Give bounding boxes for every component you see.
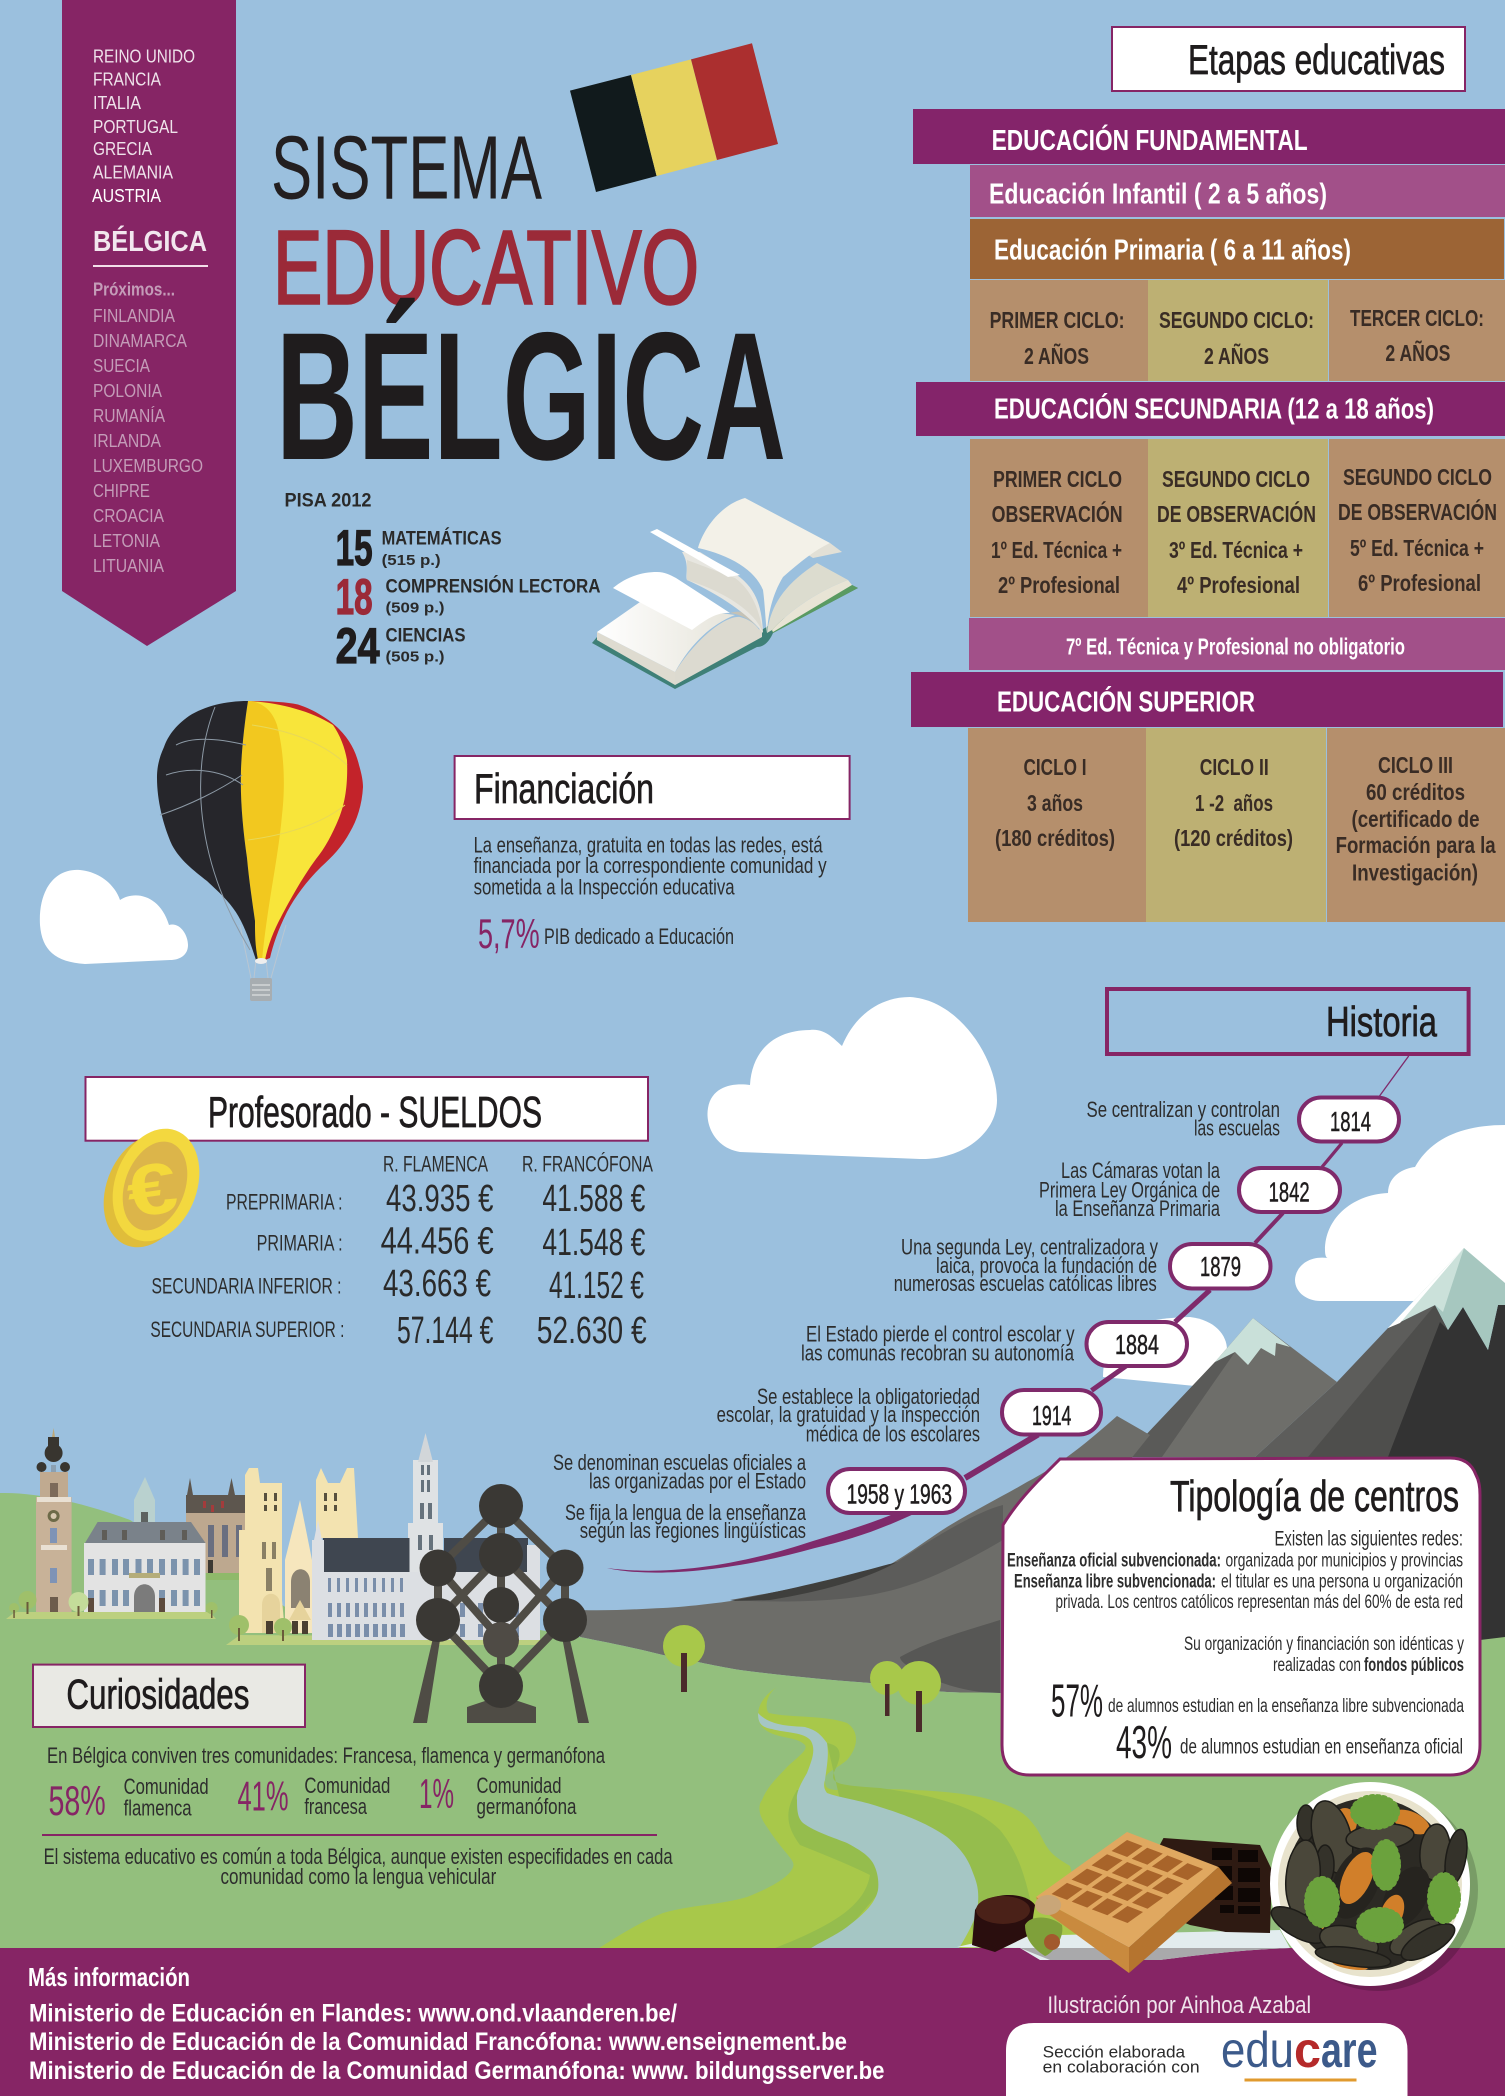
published countries list: ALEMANIA <box>93 163 173 183</box>
financing text: financiada por la correspondiente comunidad y <box>474 853 827 878</box>
higher education cycles: 1 -2 años <box>1195 790 1273 816</box>
building: grey hall <box>84 1477 206 1613</box>
upcoming countries list: SUECIA <box>93 356 150 376</box>
financing text <box>474 832 827 900</box>
panel: Curiosidades: El sistema educativo es común a toda Bélgica, aunque existen especifidades en cada <box>44 1844 673 1869</box>
footer: educare logo card: edu <box>1221 2022 1294 2078</box>
icon: open book <box>592 498 858 689</box>
higher education cycles: (180 créditos) <box>995 825 1115 851</box>
PISA 2012 results <box>284 491 601 674</box>
river: water <box>758 1713 978 1950</box>
panel: Financiación: Financiación <box>474 765 654 812</box>
event 1914: Se establece la obligatoriedad <box>757 1384 980 1409</box>
primary cycles: PRIMER CICLO: <box>990 307 1125 333</box>
footer: educare logo card: c <box>1294 2022 1321 2078</box>
PISA 2012 results: CIENCIAS <box>386 626 466 646</box>
upcoming countries list: RUMANÍA <box>93 406 165 426</box>
cloud: behind 1884 <box>1103 1317 1227 1386</box>
event 1958 y 1963: Se fija la lengua de la enseñanza <box>565 1500 807 1525</box>
salary table: 43.663 € <box>383 1263 491 1305</box>
community shares: 1% <box>419 1770 454 1817</box>
secondary cycles: PRIMER CICLO <box>993 466 1122 492</box>
secondary cycles: 2º Profesional <box>998 572 1120 598</box>
network descriptions: realizadas con <box>1273 1655 1361 1676</box>
timeline: connecting line <box>607 1056 1409 1573</box>
event 1958 y 1963: Se denominan escuelas oficiales a <box>553 1450 807 1475</box>
salary table: PREPRIMARIA : <box>226 1190 342 1214</box>
ground: green meadow <box>0 1493 1505 1950</box>
heading: Etapas educativas <box>1112 27 1465 91</box>
event 1884 <box>801 1322 1187 1366</box>
river: banks <box>596 1687 1090 1950</box>
footer: more information <box>28 1962 885 2085</box>
timeline: events <box>553 1097 1399 1543</box>
salary table: SECUNDARIA INFERIOR : <box>152 1274 342 1298</box>
primary cycles <box>970 280 1505 381</box>
panel: educación superior: EDUCACIÓN SUPERIOR <box>997 684 1255 718</box>
event 1879: numerosas escuelas católicas libres <box>894 1271 1157 1296</box>
food: plate of mussels <box>1266 1782 1478 1991</box>
stat: GDP share: PIB dedicado a Educación <box>544 924 734 949</box>
mountain: big grey foreground slope <box>580 1416 1300 1700</box>
salary table <box>150 1152 653 1352</box>
panel: Curiosidades: En Bélgica conviven tres comunidades: Francesa, flamenca y germanófona <box>47 1743 606 1768</box>
stat: GDP share <box>478 910 734 957</box>
event 1814 <box>1086 1097 1399 1142</box>
footer: educare logo card: en colaboración con <box>1043 2058 1200 2077</box>
upcoming countries list <box>93 280 203 576</box>
event 1884: El Estado pierde el control escolar y <box>806 1322 1074 1346</box>
community shares: Comunidad <box>124 1774 209 1799</box>
salary table: 41.588 € <box>542 1178 645 1220</box>
event 1842 <box>1039 1158 1340 1221</box>
PISA 2012 results: PISA 2012 <box>284 491 372 512</box>
stats: student shares: 57% <box>1051 1675 1103 1727</box>
event 1814: 1814 <box>1330 1106 1371 1137</box>
upcoming countries list: IRLANDA <box>93 431 161 451</box>
higher education cycles: Investigación) <box>1352 860 1478 886</box>
event 1958 y 1963: las organizadas por el Estado <box>589 1468 806 1494</box>
secondary cycles <box>970 439 1505 617</box>
event 1879: 1879 <box>1200 1251 1241 1282</box>
event 1879 <box>894 1235 1270 1296</box>
panel: Financiación <box>455 756 850 957</box>
ground strip right <box>226 1635 540 1645</box>
icon: hot-air balloon <box>157 701 363 1001</box>
event 1884: 1884 <box>1115 1329 1159 1360</box>
salary table: 43.935 € <box>386 1178 494 1220</box>
event 1884: las comunas recobran su autonomía <box>801 1341 1075 1366</box>
salary table: 44.456 € <box>381 1221 494 1263</box>
icon: euro coin <box>89 1116 214 1260</box>
community shares: Comunidad <box>476 1773 562 1798</box>
primary cycles: 2 AÑOS <box>1385 339 1450 366</box>
salary table: 52.630 € <box>537 1310 647 1352</box>
higher education cycles: 3 años <box>1027 790 1083 816</box>
higher education cycles: CICLO III <box>1378 752 1453 778</box>
footer: educare logo card: Sección elaborada <box>1043 2042 1186 2062</box>
salary table: R. FRANCÓFONA <box>522 1152 653 1176</box>
cloud: large centre <box>707 997 997 1159</box>
icon: euro coin: € <box>122 1147 182 1233</box>
secondary cycles: 4º Profesional <box>1177 572 1300 598</box>
heading: Historia <box>1107 989 1469 1054</box>
community shares: francesa <box>304 1794 367 1819</box>
salary table: 41.548 € <box>542 1222 645 1264</box>
event 1914: médica de los escolares <box>806 1422 980 1447</box>
building: brick palace <box>186 1478 246 1580</box>
stats: student shares: 43% <box>1116 1716 1172 1768</box>
primary cycles: 2 AÑOS <box>1024 342 1089 369</box>
PISA 2012 results: COMPRENSIÓN LECTORA <box>386 575 601 597</box>
PISA 2012 results: (509 p.) <box>386 600 445 616</box>
panel: educación superior <box>911 672 1505 922</box>
secondary cycles: SEGUNDO CICLO <box>1162 466 1310 492</box>
event 1814: las escuelas <box>1194 1116 1280 1140</box>
published countries list: GRECIA <box>93 139 152 159</box>
published countries list: PORTUGAL <box>93 117 178 137</box>
icon: Belgian flag <box>570 43 778 192</box>
banner: countries <box>62 0 236 646</box>
footer: educare logo card: are <box>1321 2022 1378 2078</box>
trees <box>663 1625 941 1732</box>
panel: Tipología de centros <box>1002 1458 1480 1775</box>
panel: Curiosidades <box>33 1665 673 1889</box>
event 1879: laica, provoca la fundación de <box>936 1253 1157 1278</box>
panel: educación secundaria <box>916 382 1505 670</box>
higher education cycles: CICLO II <box>1200 754 1269 780</box>
event 1958 y 1963 <box>553 1450 965 1543</box>
small trees near buildings <box>9 1591 292 1641</box>
community shares: flamenca <box>124 1796 192 1820</box>
community shares: 58% <box>48 1777 106 1824</box>
current country: BÉLGICA <box>93 224 207 258</box>
PISA 2012 results: 18 <box>336 569 373 625</box>
footer: more information: Más información <box>28 1962 190 1992</box>
upcoming countries list: LETONIA <box>93 531 160 551</box>
panel: Profesorado sueldos: Profesorado - SUELDOS <box>208 1088 542 1137</box>
footer: more information: Ministerio de Educación de la Comunidad Francófona: www.enseignement.be <box>29 2028 847 2056</box>
atomium <box>413 1484 589 1723</box>
footer band <box>0 1948 1505 2096</box>
higher education cycles: 60 créditos <box>1366 779 1465 805</box>
mountain: dark right peak <box>1255 1248 1505 1660</box>
food: waffles and chocolate <box>957 1832 1290 1973</box>
PISA 2012 results: 15 <box>336 520 373 576</box>
salary table: PRIMARIA : <box>257 1230 343 1256</box>
title <box>271 119 786 498</box>
event 1842: 1842 <box>1269 1176 1310 1208</box>
published countries list: REINO UNIDO <box>93 46 195 66</box>
ground strip left <box>6 1612 216 1619</box>
event 1814: Se centralizan y controlan <box>1086 1097 1280 1122</box>
higher education cycles: (certificado de <box>1352 806 1480 832</box>
heading: Historia: Historia <box>1326 998 1437 1045</box>
panel: Curiosidades: comunidad como la lengua vehicular <box>220 1864 496 1889</box>
financing text: La enseñanza, gratuita en todas las redes, está <box>474 832 823 858</box>
cloud: small left <box>40 870 188 964</box>
panel: Profesorado sueldos <box>86 1077 653 1352</box>
higher education cycles: CICLO I <box>1024 754 1086 780</box>
upcoming countries list: CROACIA <box>93 506 164 526</box>
higher education cycles <box>968 728 1505 922</box>
upcoming countries list: CHIPRE <box>93 481 150 501</box>
footer: more information: Ministerio de Educación de la Comunidad Germanófona: www. bildungsserver.be <box>29 2057 885 2085</box>
community shares: germanófona <box>476 1794 577 1819</box>
salary table: 41.152 € <box>549 1265 644 1307</box>
community shares <box>48 1770 577 1824</box>
community shares: Comunidad <box>304 1773 390 1798</box>
buildings: skyline <box>6 1428 540 1645</box>
title: SISTEMA <box>271 119 542 219</box>
network descriptions: Enseñanza oficial subvencionada: <box>1007 1550 1221 1572</box>
financing text: sometida a la Inspección educativa <box>474 874 735 900</box>
PISA 2012 results: (505 p.) <box>386 649 445 666</box>
secondary cycles: DE OBSERVACIÓN <box>1157 500 1316 527</box>
upcoming countries list: DINAMARCA <box>93 331 187 351</box>
event 1879: Una segunda Ley, centralizadora y <box>901 1235 1158 1260</box>
stats: student shares <box>1051 1675 1464 1768</box>
event 1914 <box>717 1384 1101 1447</box>
mountain: middle peak <box>1125 1318 1337 1457</box>
secondary cycles: OBSERVACIÓN <box>992 500 1123 527</box>
footer: illustrator credit: Ilustración por Ainhoa Azabal <box>1047 1992 1311 2019</box>
panel: educación fundamental: EDUCACIÓN FUNDAMENTAL <box>992 123 1308 157</box>
title: EDUCATIVO <box>273 210 699 327</box>
event 1914: 1914 <box>1032 1400 1071 1431</box>
event 1958 y 1963: según las regiones lingüísticas <box>580 1518 806 1543</box>
PISA 2012 results: 24 <box>336 618 380 674</box>
event 1914: escolar, la gratuidad y la inspección <box>717 1402 980 1427</box>
upcoming countries list: LITUANIA <box>93 556 164 576</box>
panel: educación fundamental <box>913 109 1505 381</box>
panel: educación fundamental: Educación Infantil ( 2 a 5 años) <box>989 178 1327 210</box>
river: darker bank bands <box>770 1743 1040 1950</box>
upcoming countries list: LUXEMBURGO <box>93 456 203 476</box>
published countries list: AUSTRIA <box>92 186 161 206</box>
community shares: 41% <box>238 1773 288 1820</box>
upcoming countries list: FINLANDIA <box>93 306 175 326</box>
panel: Curiosidades: Curiosidades <box>66 1670 249 1718</box>
PISA 2012 results: MATEMÁTICAS <box>382 528 502 550</box>
primary cycles: SEGUNDO CICLO: <box>1159 307 1314 333</box>
event 1958 y 1963: 1958 y 1963 <box>847 1479 952 1510</box>
salary table: R. FLAMENCA <box>383 1152 488 1176</box>
published countries list: ITALIA <box>93 93 141 113</box>
building: belfry tower <box>36 1428 72 1612</box>
PISA 2012 results: (515 p.) <box>382 552 441 569</box>
published countries list <box>92 46 195 206</box>
title: BÉLGICA <box>276 294 786 498</box>
network descriptions <box>1007 1528 1464 1676</box>
building: cathedral <box>239 1468 358 1634</box>
higher education cycles: (120 créditos) <box>1174 825 1293 851</box>
panel: educación fundamental: Educación Primaria ( 6 a 11 años) <box>994 234 1351 266</box>
event 1842: Primera Ley Orgánica de <box>1039 1178 1220 1202</box>
published countries list: FRANCIA <box>93 70 161 90</box>
salary table: 57.144 € <box>397 1310 493 1352</box>
building: town hall with spire <box>312 1433 540 1640</box>
secondary cycles: 1º Ed. Técnica + <box>991 537 1122 563</box>
event 1842: Las Cámaras votan la <box>1061 1158 1221 1183</box>
salary table: SECUNDARIA SUPERIOR : <box>150 1317 344 1342</box>
footer: educare logo card <box>1006 2022 1408 2096</box>
secondary cycles: 3º Ed. Técnica + <box>1169 537 1303 563</box>
primary cycles: 2 AÑOS <box>1204 342 1269 369</box>
upcoming countries list: POLONIA <box>93 381 162 401</box>
network descriptions: Enseñanza libre subvencionada: <box>1014 1571 1216 1592</box>
event 1842: la Enseñanza Primaria <box>1055 1196 1221 1221</box>
upcoming countries list: Próximos... <box>93 280 175 300</box>
stat: GDP share: 5,7% <box>478 910 540 957</box>
footer: more information: Ministerio de Educación en Flandes: www.ond.vlaanderen.be/ <box>29 2000 677 2028</box>
cloud: right behind mountains <box>1295 1125 1505 1301</box>
